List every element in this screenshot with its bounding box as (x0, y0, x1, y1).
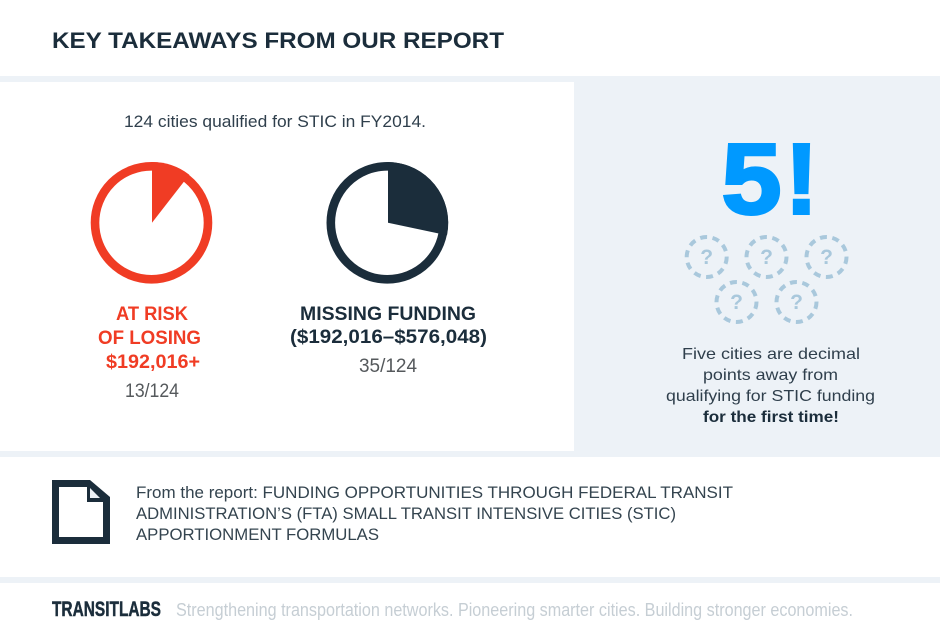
icon: five dashed question circles: ? (700, 246, 713, 269)
icon: five dashed question circles: ? (790, 291, 803, 314)
report citation text: From the report: FUNDING OPPORTUNITIES THROUGH FEDERAL TRANSIT (136, 484, 733, 502)
label: at risk of losing (98, 304, 201, 373)
label: at risk of losing: OF LOSING (98, 328, 201, 349)
report citation text: ADMINISTRATION’S (FTA) SMALL TRANSIT INTENSIVE CITIES (STIC) (136, 505, 676, 523)
icon: five dashed question circles: ? (730, 291, 743, 314)
big number 5!: 5 (722, 124, 782, 236)
icon: five dashed question circles: ? (760, 246, 773, 269)
panel: report source (52, 480, 733, 544)
icon: five dashed question circles: ? (820, 246, 833, 269)
five cities description: Five cities are decimal (682, 346, 860, 363)
footer (52, 598, 853, 621)
pie chart: at risk 13/124 (95, 162, 208, 279)
panel: five cities (574, 76, 940, 457)
tagline: Strengthening transportation networks. Pioneering smarter cities. Building stronger economies. (176, 600, 853, 620)
report citation text: APPORTIONMENT FORMULAS (136, 526, 379, 544)
big number 5! (722, 124, 818, 236)
five cities description: for the first time! (703, 409, 839, 426)
intro text: 124 cities qualified for STIC in FY2014. (124, 113, 426, 131)
panel: cities qualified (0, 82, 574, 451)
stat: 13/124: 13/124 (125, 381, 179, 402)
label: at risk of losing: AT RISK (116, 304, 188, 325)
five cities description: points away from (703, 367, 838, 384)
pie chart: missing funding 35/124 (331, 162, 448, 279)
label: at risk of losing: $192,016+ (106, 352, 200, 373)
big number 5!: ! (785, 124, 818, 236)
title: KEY TAKEAWAYS FROM OUR REPORT (52, 28, 504, 53)
label: missing funding: ($192,016–$576,048) (290, 327, 487, 348)
label: missing funding (290, 304, 487, 348)
label: missing funding: MISSING FUNDING (300, 304, 476, 325)
five cities description (666, 346, 875, 426)
report citation text (136, 484, 733, 544)
icon: document (52, 480, 110, 544)
stat: 35/124: 35/124 (359, 356, 417, 377)
logo: Transit Labs: TRANSITLABS (52, 598, 161, 621)
icon: five dashed question circles (687, 237, 846, 322)
five cities description: qualifying for STIC funding (666, 388, 875, 405)
